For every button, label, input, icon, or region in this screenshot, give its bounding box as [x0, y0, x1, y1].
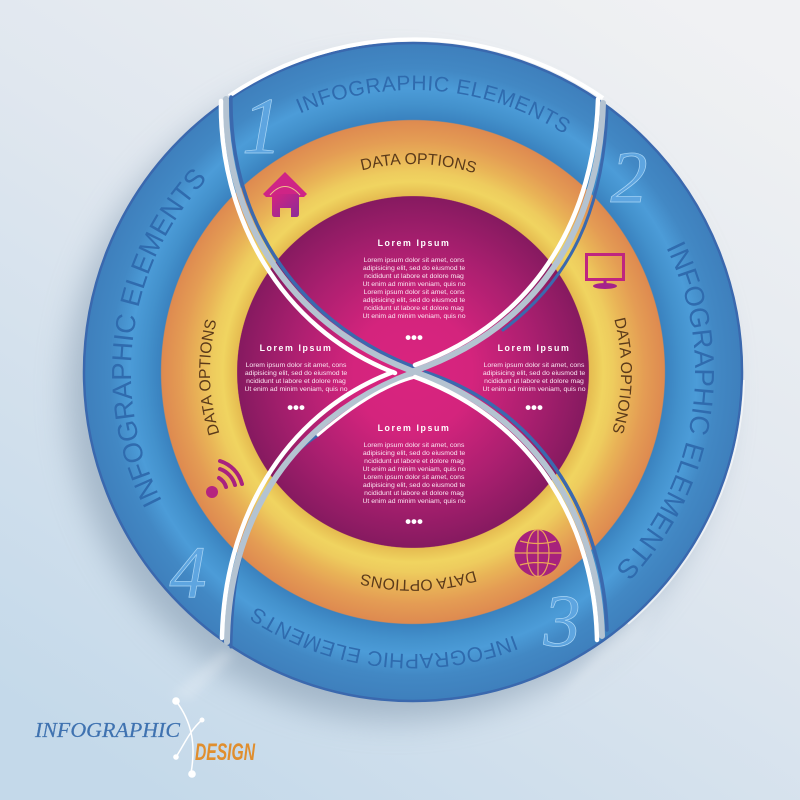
- ribbon curves dividing segments: [221, 97, 607, 647]
- text block: bottom: Ut enim ad minim veniam, quis no: [362, 466, 466, 473]
- text block: left: adipisicing elit, sed do eiusmod te: [245, 370, 347, 377]
- logo: infographic design: [34, 697, 255, 778]
- circular diagram: [82, 38, 745, 702]
- text block: top: adipisicing elit, sed do eiusmod te: [363, 265, 465, 272]
- text block: right: Ut enim ad minim veniam, quis no: [482, 386, 586, 393]
- label: data options top: DATA OPTIONS: [360, 153, 476, 172]
- light beams: [172, 590, 665, 705]
- number 2: 2: [610, 137, 648, 219]
- text block: left: Lorem ipsum dolor sit amet, cons: [246, 362, 347, 369]
- text block: bottom: [362, 423, 466, 531]
- text block: bottom: adipisicing elit, sed do eiusmod te: [363, 482, 465, 489]
- icon: globe: [514, 530, 562, 576]
- text block: bottom: Ut enim ad minim veniam, quis no: [362, 498, 466, 505]
- text block: right: adipisicing elit, sed do eiusmod te: [483, 370, 585, 377]
- text block: top: ncididunt ut labore et dolore mag: [364, 273, 464, 280]
- top segment white rim: [229, 39, 603, 98]
- text block: top: Ut enim ad minim veniam, quis no: [362, 281, 466, 288]
- icon: house: [263, 172, 307, 217]
- heading: top segment: INFOGRAPHIC ELEMENTS: [296, 76, 570, 132]
- drop shadow of circle: [68, 64, 724, 720]
- text block: left: [244, 343, 348, 417]
- heading: left segment: INFOGRAPHIC ELEMENTS: [112, 170, 204, 508]
- label: data options left: DATA OPTIONS: [199, 320, 220, 436]
- text block: top: •••: [405, 328, 423, 347]
- text block: top: Lorem ipsum dolor sit amet, cons: [364, 289, 465, 296]
- logo mark: crossed white lines with dots: [172, 697, 204, 778]
- text block: right: Lorem ipsum dolor sit amet, cons: [484, 362, 585, 369]
- text block: left: Lorem Ipsum: [260, 343, 332, 353]
- heading: bottom segment: INFOGRAPHIC ELEMENTS: [251, 608, 518, 668]
- text block: top: Ut enim ad minim veniam, quis no: [362, 313, 466, 320]
- icon: wifi: [206, 461, 242, 498]
- text block: bottom: Lorem Ipsum: [378, 423, 450, 433]
- text block: bottom: ncididunt ut labore et dolore mag: [364, 458, 464, 465]
- logo text: design: DESIGN: [195, 739, 255, 766]
- text block: top: ncididunt ut labore et dolore mag: [364, 305, 464, 312]
- number 1: 1: [242, 83, 282, 171]
- icon: monitor: [586, 254, 624, 289]
- logo text: infographic: INFOGRAPHIC: [34, 718, 181, 742]
- text block: right: [482, 343, 586, 417]
- text block: top: [362, 238, 466, 347]
- right edge highlight: [628, 380, 744, 624]
- text block: top: Lorem Ipsum: [378, 238, 450, 248]
- label: data options right: DATA OPTIONS: [613, 318, 632, 434]
- text block: top: Lorem ipsum dolor sit amet, cons: [364, 257, 465, 264]
- text block: left: •••: [287, 398, 305, 417]
- text block: bottom: ncididunt ut labore et dolore mag: [364, 490, 464, 497]
- text block: top: adipisicing elit, sed do eiusmod te: [363, 297, 465, 304]
- number 3: 3: [542, 581, 580, 663]
- label: data options bottom: DATA OPTIONS: [360, 571, 476, 591]
- text block: left: ncididunt ut labore et dolore mag: [246, 378, 346, 385]
- text block: right: ncididunt ut labore et dolore mag: [484, 378, 584, 385]
- text block: bottom: •••: [405, 512, 423, 531]
- number 4: 4: [170, 532, 206, 614]
- text block: bottom: adipisicing elit, sed do eiusmod te: [363, 450, 465, 457]
- text block: bottom: Lorem ipsum dolor sit amet, cons: [364, 442, 465, 449]
- concentric rings: blue, orange, magenta: [84, 43, 742, 701]
- text block: bottom: Lorem ipsum dolor sit amet, cons: [364, 474, 465, 481]
- text block: right: •••: [525, 398, 543, 417]
- text block: right: Lorem Ipsum: [498, 343, 570, 353]
- text block: left: Ut enim ad minim veniam, quis no: [244, 386, 348, 393]
- heading: right segment: INFOGRAPHIC ELEMENTS: [618, 242, 714, 578]
